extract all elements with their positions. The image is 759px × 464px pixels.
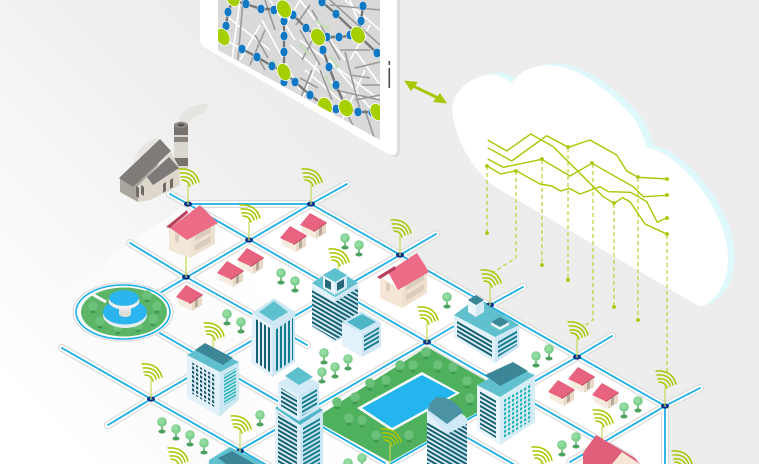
fountain upper bowl bbox=[108, 292, 140, 310]
tablet with city map bbox=[200, 0, 400, 157]
trees bbox=[157, 233, 643, 464]
fountain basin bbox=[103, 302, 147, 328]
park trees bbox=[332, 347, 475, 442]
chart points bbox=[485, 145, 669, 322]
building: small striped box bbox=[342, 311, 381, 357]
pool water bbox=[362, 375, 456, 428]
public fountain park bbox=[73, 283, 173, 341]
roof cube bbox=[468, 300, 476, 317]
wifi signals bbox=[142, 169, 692, 464]
trees bbox=[88, 290, 162, 334]
green hub nodes bbox=[213, 0, 387, 123]
cloud bbox=[452, 63, 735, 373]
blue network nodes bbox=[222, 0, 381, 117]
building: tall vertical-stripe tower bbox=[251, 298, 295, 377]
smoke bbox=[134, 104, 208, 165]
big house bottom right bbox=[583, 435, 640, 464]
building: dotted office lower right bbox=[477, 362, 535, 445]
line chart bbox=[487, 134, 667, 234]
building: wide office bbox=[454, 295, 519, 363]
building: bottom edge office bbox=[209, 447, 263, 464]
stem from node to big house bbox=[185, 255, 187, 277]
city ground bbox=[0, 204, 665, 464]
smokestack bbox=[174, 122, 188, 170]
building: curved tower bbox=[427, 397, 467, 464]
central park with pool bbox=[323, 347, 485, 462]
dashed data lines bbox=[487, 148, 667, 373]
network paths bbox=[223, 0, 377, 112]
building: tiered tower bbox=[275, 367, 323, 464]
building: striped tower with penthouse bbox=[312, 268, 358, 342]
tablet home button bbox=[388, 61, 390, 88]
map screen bbox=[218, 0, 380, 140]
building: office with dotted windows bbox=[187, 343, 239, 417]
big house right bbox=[377, 253, 429, 308]
big house left bbox=[166, 205, 218, 258]
small houses bbox=[176, 213, 619, 409]
factory bbox=[119, 104, 208, 202]
double arrow between tablet and cloud bbox=[404, 80, 447, 104]
network nodes bbox=[147, 201, 669, 454]
road network bbox=[62, 184, 700, 464]
